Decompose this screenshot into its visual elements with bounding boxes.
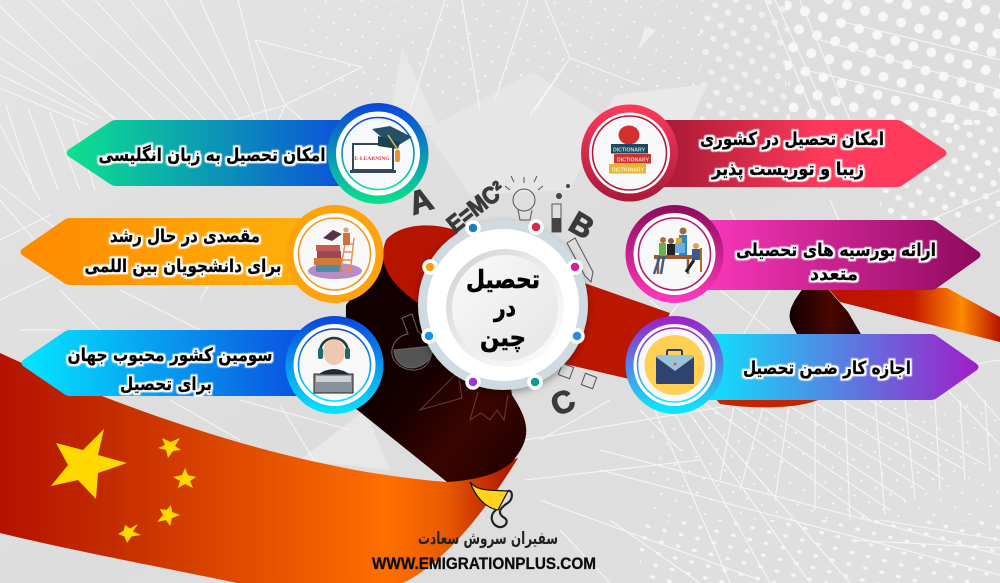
ribbon: right band <box>565 278 1000 407</box>
panel: growing destination <box>20 205 384 303</box>
doodles around the centre <box>392 176 600 423</box>
label: مقصدی در حال رشد <box>110 226 260 247</box>
hub title: چین <box>480 323 526 353</box>
website url: WWW.EMIGRATIONPLUS.COM <box>372 554 596 573</box>
ribbon: China flag band <box>0 353 518 583</box>
icon: small star one <box>158 438 181 458</box>
logo wordmark: سفیران سروش سعادت <box>418 529 558 549</box>
icon: apple and dictionaries <box>609 126 651 174</box>
panel: third most popular: برای تحصیل <box>120 374 212 395</box>
panel: growing destination: برای دانشجویان بین اللمی <box>84 256 282 277</box>
doodle: test tube <box>552 184 570 232</box>
panel: scholarships <box>626 205 980 303</box>
icon: apple and dictionaries: DICTIONARY <box>613 148 646 154</box>
label: امکان تحصیل به زبان انگلیسی <box>98 144 326 166</box>
hub title: تحصیل <box>466 265 540 294</box>
icon: apple and dictionaries: DICTIONARY <box>617 158 650 164</box>
doodle: pencil <box>567 238 593 282</box>
label: ارائه بورسیه های تحصیلی <box>736 240 936 261</box>
panel: English-language study <box>66 103 428 204</box>
icon: small star four <box>118 524 141 543</box>
icon: e-learning laptop: E-LEARNING <box>354 156 390 162</box>
icon: e-learning laptop <box>350 126 412 173</box>
doodle: letter B: B <box>563 205 600 246</box>
doodle: calculator keys <box>558 363 597 389</box>
ribbon: central dark fold <box>345 225 526 482</box>
doodle: formula E=MC2: E=MC² <box>442 176 511 238</box>
icon: support agent <box>314 338 353 393</box>
hub title: در <box>493 294 516 322</box>
panel: central hub <box>418 220 588 390</box>
panel: beautiful touristic country: زیبا و توریست پذیر <box>711 159 864 180</box>
label: امکان تحصیل در کشوری <box>700 129 884 150</box>
label: اجازه کار ضمن تحصیل <box>743 358 911 379</box>
hub title <box>466 265 540 353</box>
icon: books and ladder <box>308 227 362 279</box>
doodle: triangle ruler <box>420 372 462 410</box>
doodle: medal <box>470 392 508 420</box>
icon: apple and dictionaries: DICTIONARY <box>612 168 645 174</box>
icon: winged emblem <box>470 482 512 527</box>
icon: small star two <box>173 468 196 488</box>
doodle: light bulb <box>505 176 543 220</box>
panel: beautiful touristic country <box>581 104 946 202</box>
panel: third most popular <box>22 316 384 414</box>
panel: work permission <box>626 316 978 414</box>
label: سومین کشور محبوب جهان <box>68 345 272 366</box>
icon: small star three <box>157 505 180 526</box>
hub dots <box>423 221 583 388</box>
icon: briefcase <box>656 350 694 384</box>
panel: scholarships: متعدد <box>810 264 858 285</box>
logo <box>372 482 596 573</box>
doodle: letter C: C <box>545 382 580 423</box>
icon: large yellow star <box>51 429 127 499</box>
icon: group at table <box>654 228 701 274</box>
doodle: letter A: A <box>404 180 437 222</box>
doodle: flask <box>392 314 432 370</box>
